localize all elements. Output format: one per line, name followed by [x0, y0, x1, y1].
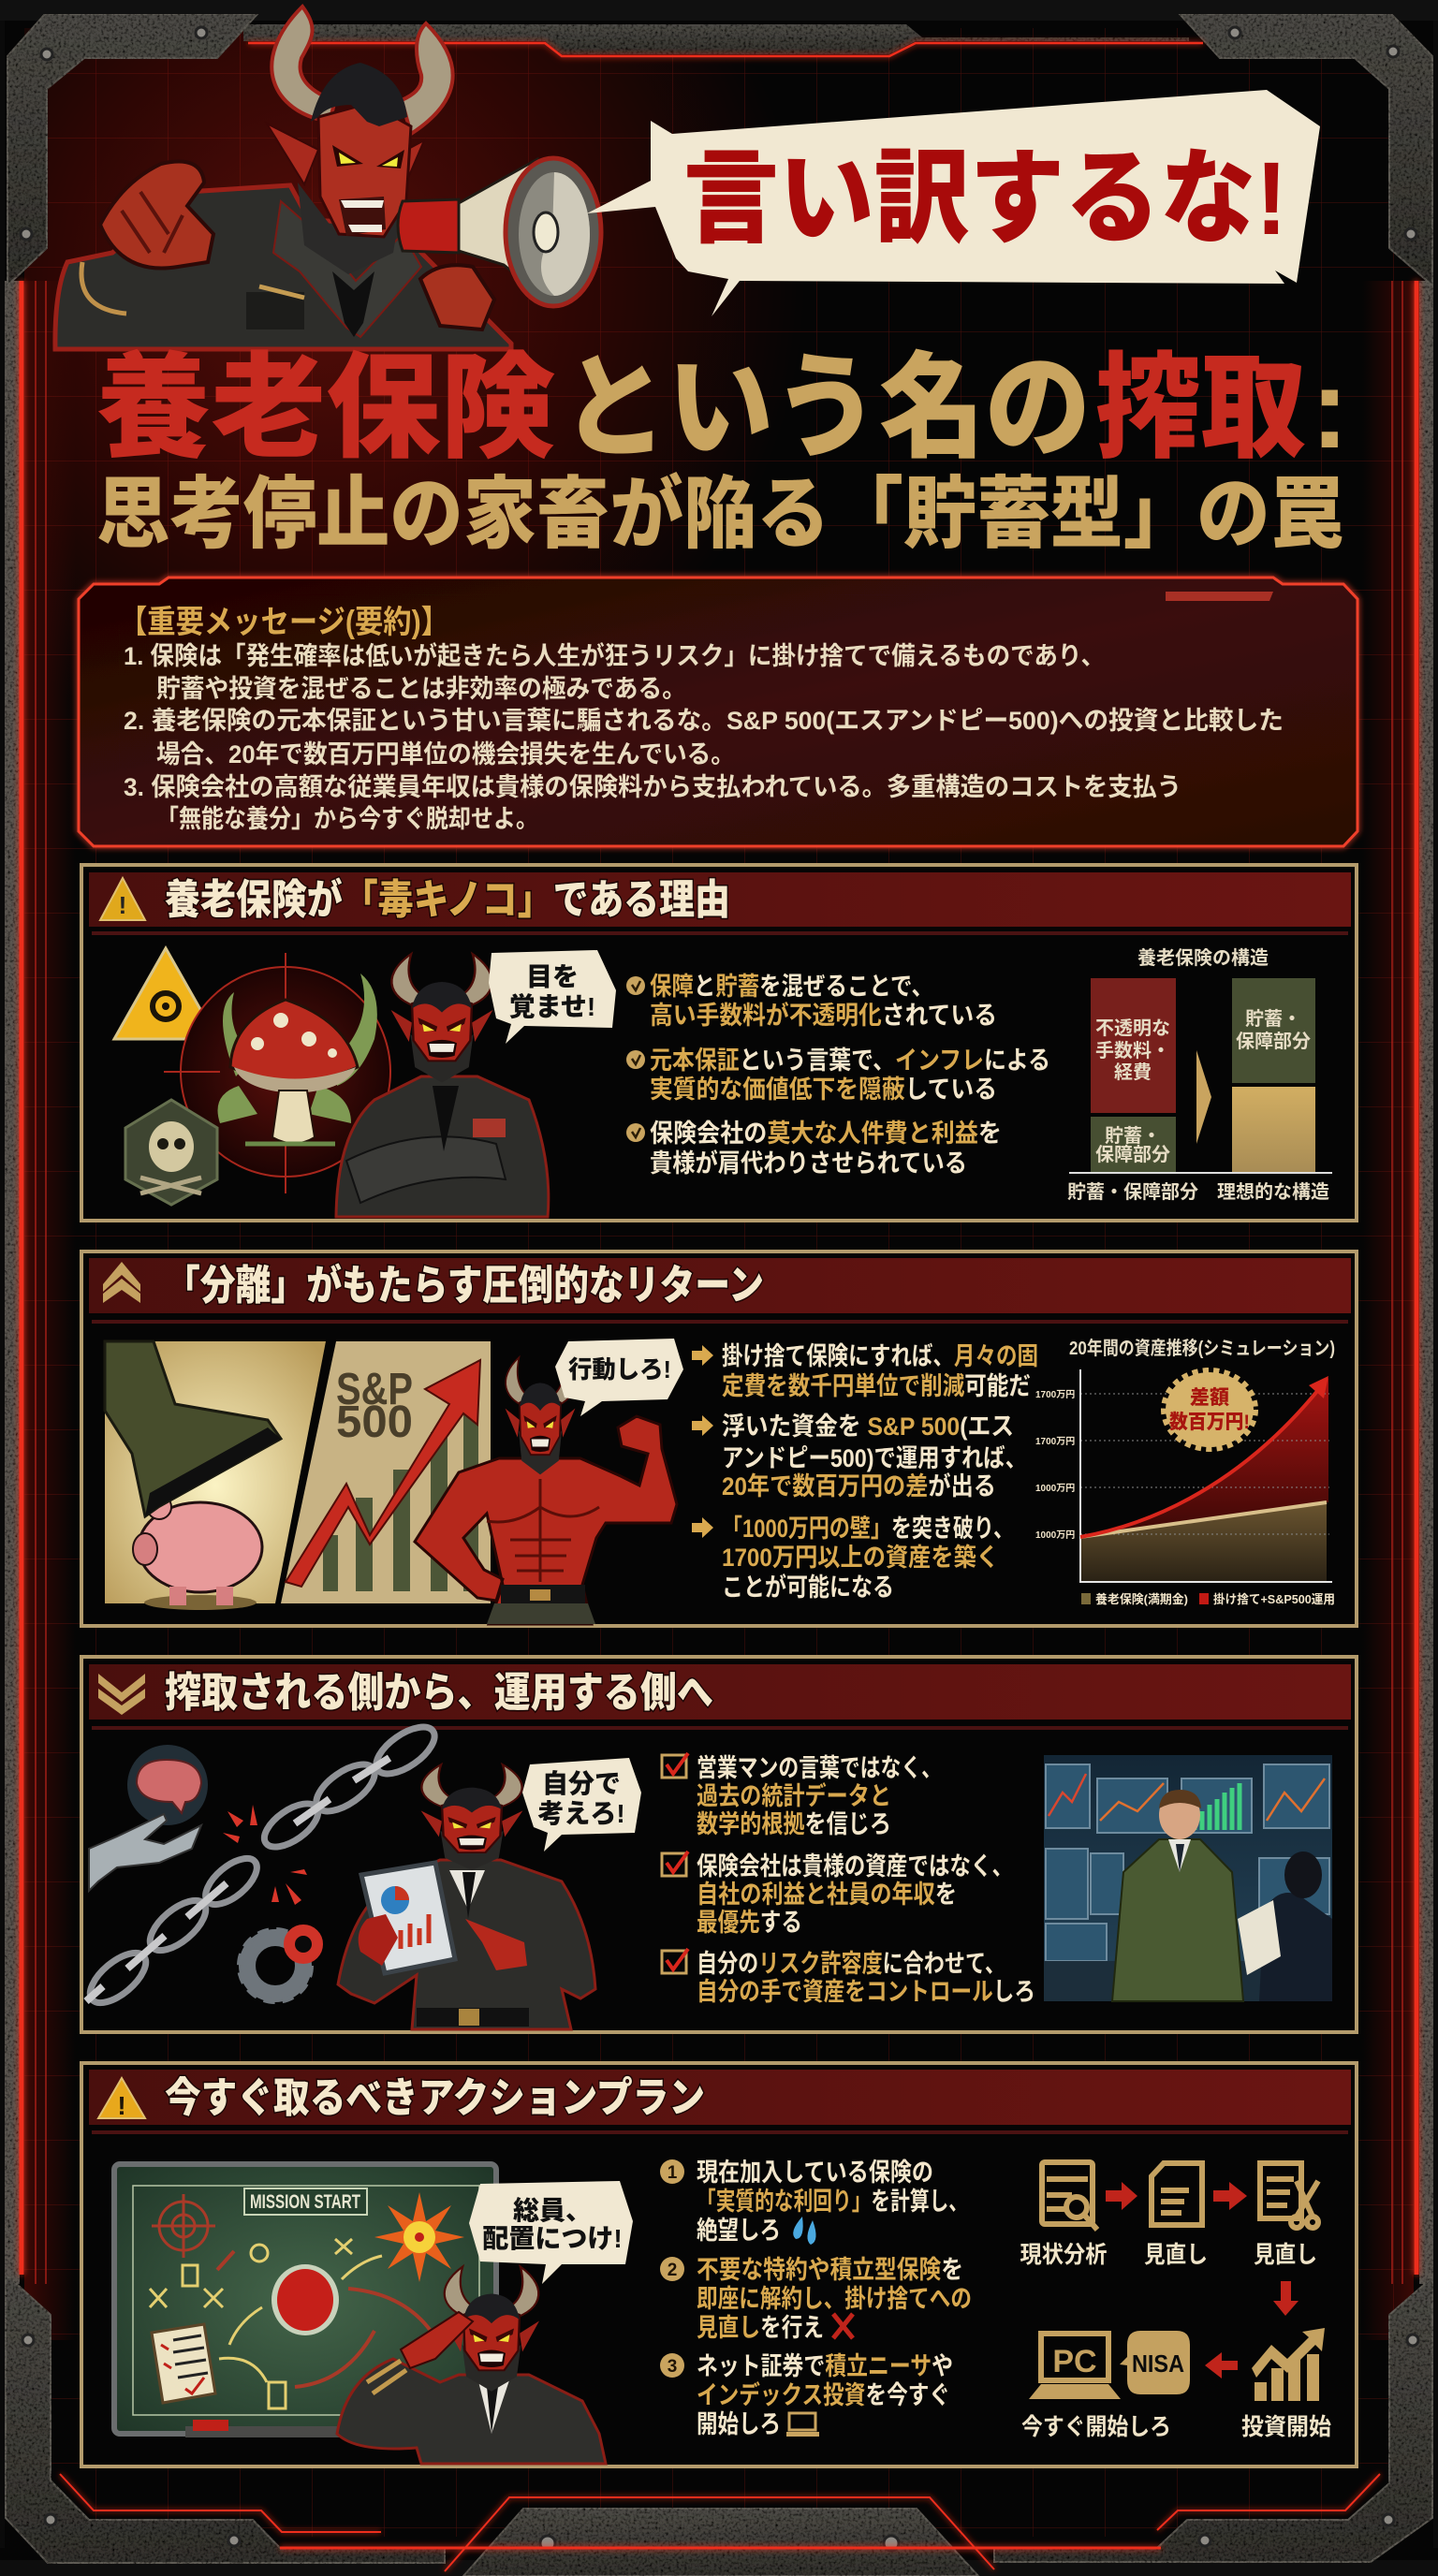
flow icons	[1020, 2162, 1331, 2440]
bullets: 1700万円以上の資産を築く	[722, 1544, 999, 1572]
bar chart: structure: 理想的な構造	[1217, 1181, 1329, 1203]
title: という名の	[562, 344, 1091, 472]
numbered steps: 現在加入している保険の	[697, 2159, 933, 2187]
numbered steps: 3	[668, 2357, 677, 2377]
numbered steps: 即座に解約し、掛け捨てへの	[697, 2285, 972, 2313]
numbered steps: 開始しろ	[697, 2410, 781, 2438]
speech bubble: 目を	[526, 962, 579, 991]
flow icons: 今すぐ開始しろ	[1021, 2414, 1171, 2440]
bar chart: structure: 貯蓄・保障部分	[1067, 1181, 1198, 1203]
area chart: 20 year simulation: 1700万円	[1035, 1436, 1075, 1447]
bullets: 「1000万円の壁」を突き破り、	[722, 1515, 1014, 1543]
illustration: mission board: MISSION START	[250, 2191, 360, 2213]
panel: from exploited to investor	[81, 1657, 1357, 2032]
header: !	[117, 2091, 126, 2120]
bullets: 保険会社は貴様の資産ではなく、	[697, 1852, 1013, 1881]
panel: summary: 「無能な養分」から今すぐ脱却せよ。	[156, 805, 538, 833]
bullets: 自分の手で資産をコントロールしろ	[697, 1978, 1035, 2006]
bullets: 掛け捨て保険にすれば、月々の固	[722, 1342, 1038, 1370]
icon: growth chart	[1252, 2328, 1325, 2401]
bullets	[692, 1342, 1038, 1602]
bar chart: structure: 養老保険の構造	[1137, 947, 1269, 969]
numbered steps: 不要な特約や積立型保険を	[697, 2256, 963, 2284]
numbered steps: 「実質的な利回り」を計算し、	[697, 2188, 968, 2216]
beard	[298, 183, 404, 274]
area chart: 20 year simulation	[1035, 1338, 1335, 1606]
icon: biohazard	[114, 948, 217, 1039]
illustration: sp500 chart	[281, 1341, 491, 1603]
speech bubble: 覚ませ!	[509, 992, 595, 1021]
area chart: 20 year simulation: 数百万円!	[1169, 1412, 1250, 1433]
header: 今すぐ取るべきアクションプラン	[165, 2075, 705, 2121]
numbered steps: 1	[668, 2163, 678, 2183]
bullets: 高い手数料が不透明化されている	[650, 1001, 997, 1030]
illustration: mission board	[114, 2164, 496, 2437]
megaphone	[459, 159, 552, 304]
icon: scissors document	[1260, 2163, 1318, 2228]
header	[89, 1664, 1351, 1730]
bar chart: structure: 保障部分	[1095, 1144, 1170, 1165]
pointing hand	[100, 161, 213, 269]
bullets: 過去の統計データと	[697, 1781, 891, 1810]
numbered steps: ネット証券で積立ニーサや	[697, 2352, 953, 2380]
title	[96, 344, 1349, 558]
flow icons: 現状分析	[1020, 2242, 1107, 2268]
area chart: 20 year simulation: 1000万円	[1035, 1530, 1075, 1541]
bullets: 最優先する	[697, 1909, 802, 1937]
bar chart: structure: 手数料・	[1095, 1040, 1170, 1061]
illustration: broken chain	[81, 1718, 442, 2012]
icon: gears	[240, 1930, 317, 2001]
devil body	[55, 185, 511, 349]
panel: summary: 1. 保険は「発生確率は低いが起きたら人生が狂うリスク」に掛け捨てで備えるものであり、	[124, 641, 1105, 670]
speech bubble	[555, 1339, 683, 1416]
illustration: boot on piggy bank	[105, 1341, 326, 1610]
panel: poison mushroom	[81, 865, 1357, 1221]
area chart: 20 year simulation: 差額	[1190, 1387, 1229, 1409]
bullets: 貴様が肩代わりさせられている	[650, 1149, 967, 1178]
bullets	[662, 1753, 1035, 2006]
header: 養老保険が「毒キノコ」である理由	[165, 876, 730, 923]
numbered steps: 2	[668, 2261, 677, 2280]
horns	[271, 7, 335, 122]
area chart: 20 year simulation: 1700万円	[1035, 1389, 1075, 1400]
speech bubble	[469, 2181, 633, 2284]
bar chart: structure: 貯蓄・	[1105, 1125, 1161, 1147]
bullets: 保険会社の莫大な人件費と利益を	[650, 1120, 1002, 1148]
title: :	[1311, 344, 1349, 472]
area chart: 20 year simulation: 養老保険(満期金)	[1095, 1592, 1188, 1606]
icon: NISA: NISA	[1132, 2349, 1184, 2378]
bullets: 営業マンの言葉ではなく、	[697, 1754, 942, 1782]
header	[89, 2070, 1351, 2134]
bullets: 浮いた資金を S&P 500(エス	[722, 1412, 1014, 1441]
bar chart: structure: 貯蓄・	[1245, 1008, 1301, 1030]
header: !	[119, 891, 126, 919]
bullets: アンドピー500)で運用すれば、	[722, 1444, 1027, 1472]
speech bubble: 自分で	[542, 1769, 621, 1798]
icon: brain and robot hand	[89, 1745, 208, 1891]
flow icons: 投資開始	[1241, 2414, 1331, 2440]
bullets	[626, 973, 1050, 1178]
bullets: 元本保証という言葉で、インフレによる	[650, 1046, 1050, 1075]
header: 「分離」がもたらす圧倒的なリターン	[165, 1262, 764, 1309]
flow icons: 見直し	[1254, 2242, 1317, 2268]
speech bubble: 総員、	[513, 2196, 592, 2225]
title: 搾取	[1095, 344, 1306, 472]
panel: separation returns	[81, 1251, 1357, 1626]
icon: laptop: PC	[1052, 2344, 1097, 2379]
icon: laptop	[1029, 2334, 1121, 2399]
eyes	[332, 145, 404, 168]
bullets: 保障と貯蓄を混ぜることで、	[650, 973, 933, 1001]
title: 養老保険	[96, 344, 555, 472]
speech bubble: 考えろ!	[537, 1799, 625, 1828]
icon: document	[1152, 2163, 1202, 2225]
title: 思考停止の家畜が陥る「貯蓄型」の罠	[96, 470, 1343, 558]
speech bubble: 配置につけ!	[482, 2224, 623, 2253]
muscular devil	[415, 1357, 677, 1624]
top devil with megaphone	[55, 7, 601, 349]
numbered steps: 見直しを行え	[697, 2314, 824, 2342]
speech bubble	[522, 1758, 641, 1852]
numbered steps	[660, 2159, 972, 2438]
bar chart: structure: 保障部分	[1236, 1031, 1311, 1052]
bullets: 定費を数千円単位で削減可能だ	[722, 1372, 1031, 1400]
speech bubble	[587, 90, 1320, 316]
bullets: 数学的根拠を信じろ	[697, 1810, 891, 1838]
icon: NISA	[1120, 2331, 1190, 2394]
panel: summary: 3. 保険会社の高額な従業員年収は貴様の保険料から支払われている。多重構造のコストを支払う	[124, 773, 1181, 801]
face	[318, 103, 411, 237]
bar chart: structure	[1067, 947, 1332, 1203]
area chart: 20 year simulation: 1000万円	[1035, 1483, 1075, 1494]
panel: summary: 場合、20年で数百万円単位の機会損失を生んでいる。	[156, 740, 735, 768]
header	[89, 872, 1351, 935]
devil arms crossed	[336, 954, 549, 1217]
hair	[311, 63, 407, 126]
mouth	[339, 197, 386, 236]
bar chart: structure: 経費	[1114, 1061, 1152, 1083]
flow icons: 見直し	[1144, 2242, 1208, 2268]
illustration: control room	[1044, 1755, 1332, 2001]
panel: summary: 【重要メッセージ(要約)】	[119, 605, 449, 640]
numbered steps: 絶望しろ	[697, 2217, 781, 2245]
bar chart: structure: 不透明な	[1095, 1017, 1170, 1039]
illustration: sp500 chart: 500	[336, 1398, 413, 1447]
saluting devil	[337, 2266, 606, 2464]
devil with tablet	[338, 1764, 595, 2029]
bullets: 自社の利益と社員の年収を	[697, 1881, 957, 1909]
bullets: 自分のリスク許容度に合わせて、	[697, 1950, 1005, 1978]
bullets: 実質的な価値低下を隠蔽している	[650, 1076, 997, 1104]
header	[89, 1258, 1351, 1324]
bullets: ことが可能になる	[722, 1573, 894, 1602]
icon: calculator	[1042, 2162, 1097, 2230]
speech bubble: 行動しろ!	[568, 1355, 671, 1383]
area chart: 20 year simulation: 掛け捨て+S&P500運用	[1213, 1592, 1335, 1606]
header: 搾取される側から、運用する側へ	[165, 1670, 713, 1716]
panel: action plan	[81, 2063, 1357, 2466]
speech bubble: 言い訳するな!	[683, 141, 1287, 256]
ears	[267, 124, 424, 184]
bullets: 20年で数百万円の差が出る	[722, 1471, 996, 1500]
panel: summary	[79, 578, 1357, 846]
panel: summary: 2. 養老保険の元本保証という甘い言葉に騙されるな。S&P 500(エスアンドピー500)への投資と比較した	[124, 707, 1284, 735]
speech bubble	[489, 950, 616, 1044]
panel: summary: 貯蓄や投資を混ぜることは非効率の極みである。	[156, 675, 686, 703]
icon: mushroom	[164, 953, 390, 1193]
illustration: sp500 chart: S&P	[336, 1365, 413, 1414]
numbered steps: インデックス投資を今すぐ	[697, 2380, 950, 2409]
area chart: 20 year simulation: 20年間の資産推移(シミュレーション)	[1069, 1338, 1335, 1359]
icon: skull badge	[125, 1100, 217, 1205]
